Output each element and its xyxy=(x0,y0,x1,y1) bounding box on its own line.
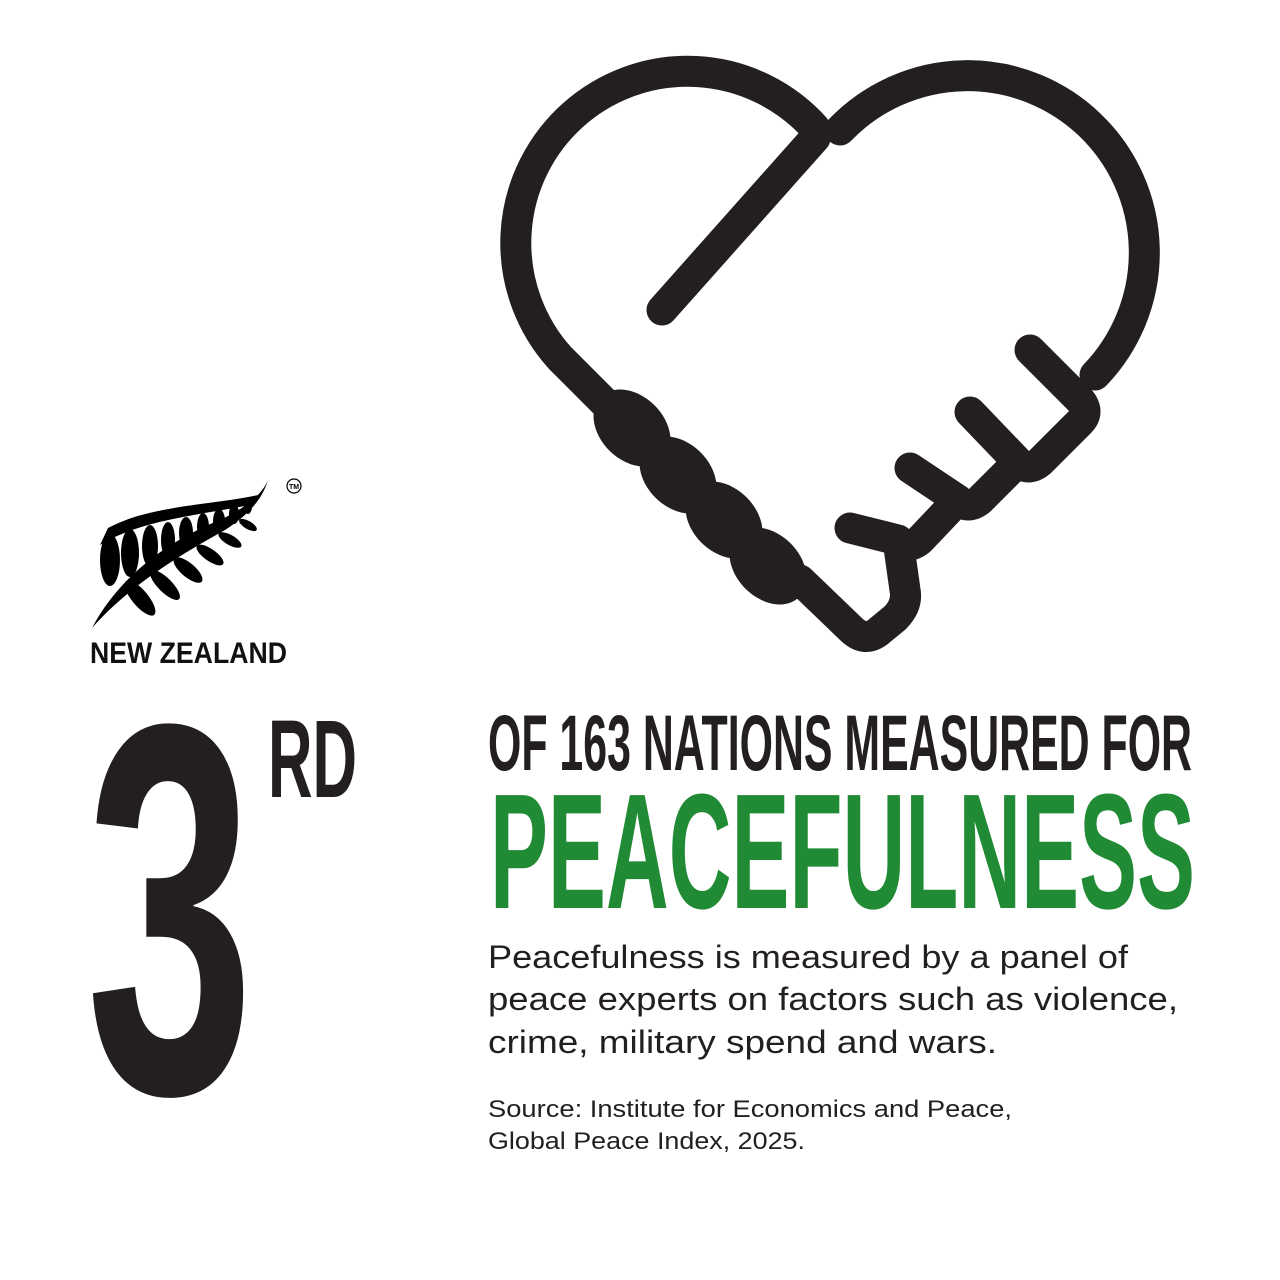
knuckles xyxy=(578,374,822,620)
trademark symbol xyxy=(287,479,301,493)
description paragraph: peace experts on factors such as violence, xyxy=(488,981,1178,1017)
description paragraph: crime, military spend and wars. xyxy=(488,1024,997,1060)
left hand finger xyxy=(662,138,815,310)
right hand outline xyxy=(840,76,1144,375)
icon: heart made of clasped hands xyxy=(516,71,1144,637)
big rank number: 3 xyxy=(86,614,254,1204)
rank suffix: RD xyxy=(268,698,357,821)
description paragraph: Peacefulness is measured by a panel of xyxy=(488,939,1128,975)
source note: Global Peace Index, 2025. xyxy=(488,1128,805,1155)
description paragraph xyxy=(488,939,1178,1060)
logo text: NEW ZEALAND: NEW ZEALAND xyxy=(90,637,287,670)
logo: silver fern xyxy=(92,479,301,628)
left hand outline xyxy=(516,71,815,410)
right hand fingers xyxy=(800,350,1085,637)
logo: silver fern: TM xyxy=(289,484,299,491)
source note: Source: Institute for Economics and Peace, xyxy=(488,1096,1012,1123)
source note xyxy=(488,1096,1012,1155)
